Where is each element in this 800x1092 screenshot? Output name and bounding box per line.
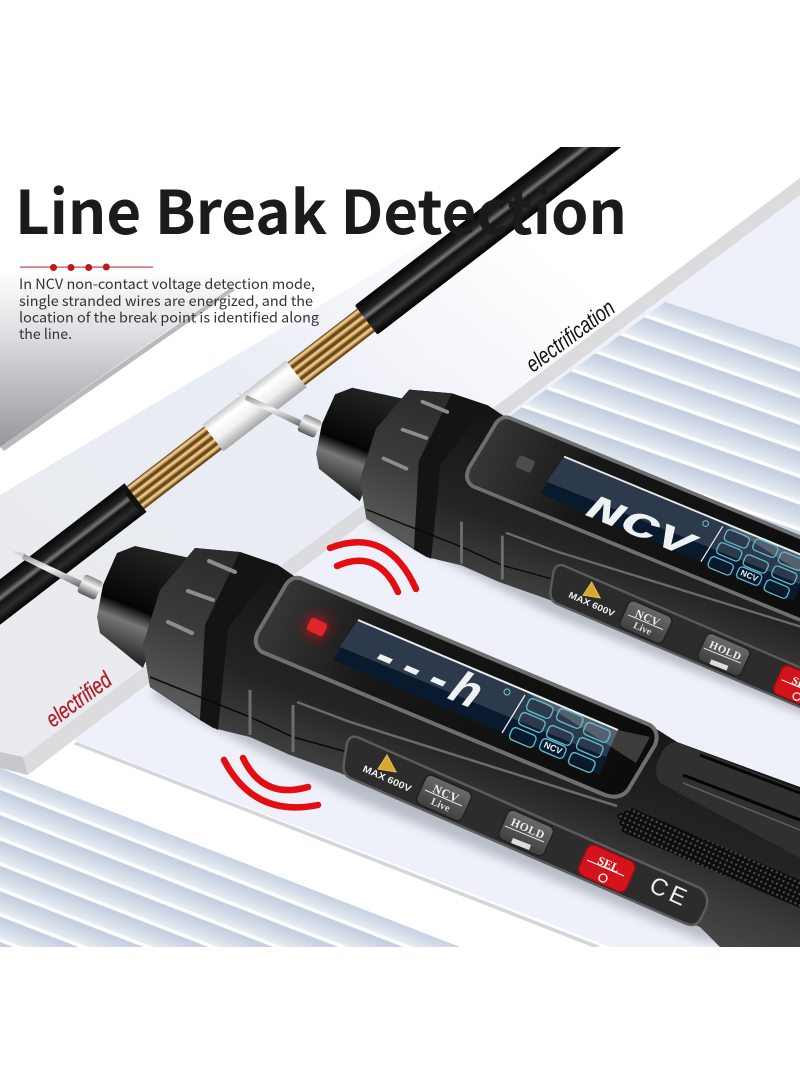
lower tester pen: SEL (595, 853, 622, 875)
signal arcs: lower pen (224, 758, 318, 807)
wire with stripped break (0, 116, 624, 629)
label: electrification: electrification (521, 294, 620, 377)
top right louvers (500, 302, 800, 600)
title: Line Break Detection (15, 165, 627, 252)
description text: In NCV non-contact voltage detection mode, (19, 274, 315, 294)
upper tester pen (235, 388, 800, 764)
white footer (0, 947, 800, 1092)
upper tester pen: NCV (573, 490, 706, 566)
signal arcs: upper pen (330, 542, 416, 592)
lower tester pen: CE (645, 872, 694, 913)
lower tester pen: NCV (542, 740, 564, 756)
lower tester pen: HOLD (509, 817, 546, 842)
top crop cover for wire (540, 100, 670, 147)
description text: single stranded wires are energized, and the (19, 291, 313, 311)
lower tester pen (12, 546, 800, 950)
upper tester pen: MAX 600V (567, 590, 616, 619)
lower tester pen: Live (429, 796, 452, 815)
description text: the line. (19, 324, 72, 344)
upper tester pen: Live (631, 620, 654, 638)
lower tester pen: NCV (431, 781, 461, 805)
label: electrified: electrified (41, 666, 117, 732)
upper tester pen: NCV (739, 567, 760, 584)
description text: location of the break point is identified along (19, 308, 319, 328)
lower tester pen: MAX 600V (361, 764, 413, 795)
description text (19, 274, 319, 344)
red dotted divider (20, 264, 153, 271)
lower tester pen: ---h (355, 632, 494, 720)
upper tester pen: HOLD (707, 639, 743, 663)
bottom left louvers (0, 768, 460, 947)
upper tester pen: NCV (633, 608, 662, 629)
